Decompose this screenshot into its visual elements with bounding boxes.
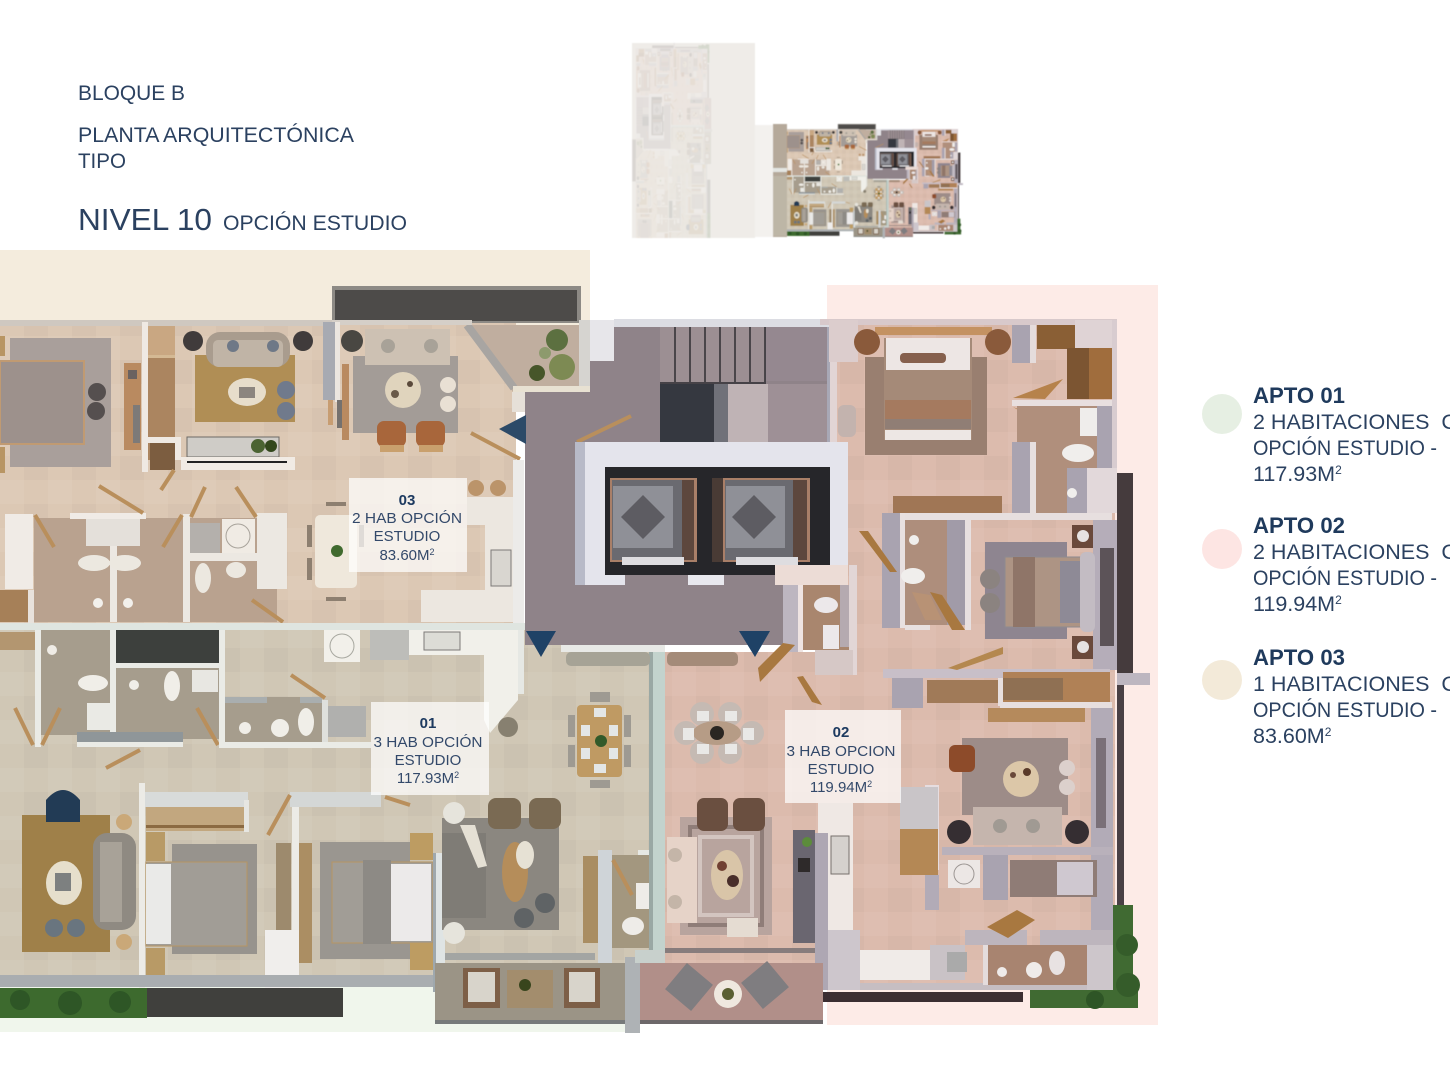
legend item: apto 01: APTO 01 <box>1253 383 1345 408</box>
level heading: NIVEL 10 <box>78 202 212 237</box>
entry marker: lower-left triangle <box>526 631 556 657</box>
legend item: apto 01 <box>1202 383 1450 486</box>
title block <box>78 82 407 237</box>
floor plan <box>0 286 1150 1033</box>
legend item: apto 02: APTO 02 <box>1253 513 1345 538</box>
key plan thumbnail <box>632 42 963 238</box>
partition, desk and white block <box>265 792 410 992</box>
legend item: apto 01: OPCIÓN ESTUDIO - <box>1253 435 1437 460</box>
living room <box>442 798 561 944</box>
living room <box>323 322 458 452</box>
closets row <box>883 647 1113 930</box>
balcony <box>640 948 823 1024</box>
bedroom with rug <box>22 783 145 992</box>
label card: apartment 02 <box>785 710 901 803</box>
walk-in closet <box>1012 320 1117 470</box>
label card: apartment 01: 2 <box>454 770 459 780</box>
legend item: apto 03: OPCIÓN ESTUDIO - <box>1253 697 1437 722</box>
powder room <box>965 910 1117 990</box>
label card: apartment 01: 01 <box>420 715 436 732</box>
legend item: apto 03: APTO 03 <box>1253 645 1345 670</box>
apartment 03 <box>0 286 590 625</box>
elevator 1 <box>610 478 697 565</box>
option heading: OPCIÓN ESTUDIO <box>223 212 407 235</box>
legend item: apto 01: 117.93M <box>1253 462 1335 486</box>
block name: BLOQUE B <box>78 82 185 105</box>
bedroom 2 <box>145 792 257 975</box>
elevator 2 <box>712 478 810 565</box>
label card: apartment 02: ESTUDIO <box>808 761 874 778</box>
study with rug <box>181 331 313 470</box>
panel: apartment 03 beige zone <box>0 250 590 330</box>
legend item: apto 03: 2 <box>1325 725 1332 739</box>
legend item: apto 03 <box>1202 645 1450 748</box>
legend item: apto 02: 2 <box>1335 593 1342 607</box>
label card: apartment 01: 117.93M <box>397 770 454 787</box>
panel: apartment 02 pink zone <box>827 285 1158 1025</box>
label card: apartment 03: 2 HAB OPCIÓN <box>352 510 462 527</box>
legend item: apto 03: 83.60M <box>1253 724 1325 748</box>
label card: apartment 02: 119.94M <box>810 779 867 796</box>
faded neighbouring block <box>632 42 773 238</box>
master bedroom <box>838 325 1036 455</box>
dining area <box>674 702 764 764</box>
desk and dividing wall <box>882 496 1112 628</box>
highlighted block B <box>773 124 963 238</box>
bathrooms <box>0 433 520 624</box>
legend item: apto 02: 119.94M <box>1253 592 1335 616</box>
separating wall and desk <box>561 645 738 963</box>
label card: apartment 03: 2 <box>430 547 435 557</box>
bedroom <box>0 336 141 473</box>
master bath <box>1012 406 1117 513</box>
label card: apartment 02: 02 <box>833 724 849 741</box>
laundry and study room <box>900 785 1097 910</box>
bedroom 3 <box>320 833 445 992</box>
kitchen <box>793 803 1100 990</box>
legend item: apto 01: 2 <box>1335 463 1342 477</box>
kitchen and dining <box>307 460 524 625</box>
entry marker: lower-right triangle <box>739 631 770 657</box>
label card: apartment 01: 3 HAB OPCIÓN <box>374 734 482 751</box>
bathrooms and shaft <box>0 630 371 768</box>
living room <box>942 738 1113 855</box>
stairs <box>660 327 831 442</box>
core block return <box>830 442 848 585</box>
hedge and planter <box>823 905 1140 1009</box>
building core <box>525 319 848 645</box>
window strip <box>1093 473 1150 905</box>
living area with striped rug <box>667 798 772 937</box>
exterior wall, planter and hedge <box>0 975 433 1018</box>
balcony <box>435 953 640 1033</box>
bathroom corner <box>583 850 650 963</box>
label card: apartment 03: 03 <box>399 492 415 509</box>
dining <box>568 692 631 788</box>
legend item: apto 02: OPCIÓN ESTUDIO - <box>1253 565 1437 590</box>
label card: apartment 01: ESTUDIO <box>395 752 461 769</box>
second bath <box>859 520 971 630</box>
panel: apartment 01 green zone <box>0 985 640 1032</box>
apartment 01 <box>0 623 650 1033</box>
legend item: apto 02 <box>1202 513 1450 616</box>
label card: apartment 03: 83.60M <box>379 547 430 564</box>
second bedroom <box>980 525 1095 659</box>
label card: apartment 03: ESTUDIO <box>374 528 440 545</box>
plan heading: PLANTA ARQUITECTÓNICA <box>78 124 354 147</box>
plan heading line two: TIPO <box>78 150 126 173</box>
label card: apartment 02: 2 <box>867 779 872 789</box>
apartment 02 <box>561 319 1150 1024</box>
elevator shaft block <box>575 442 848 585</box>
label card: apartment 03 <box>349 478 467 572</box>
bath by core <box>758 565 857 705</box>
kitchen <box>324 630 524 737</box>
entry marker: left triangle <box>499 415 526 444</box>
balcony with planter <box>332 286 590 412</box>
label card: apartment 01 <box>371 702 489 795</box>
closet <box>142 322 181 472</box>
label card: apartment 02: 3 HAB OPCION <box>786 743 896 760</box>
legend <box>1202 383 1450 748</box>
